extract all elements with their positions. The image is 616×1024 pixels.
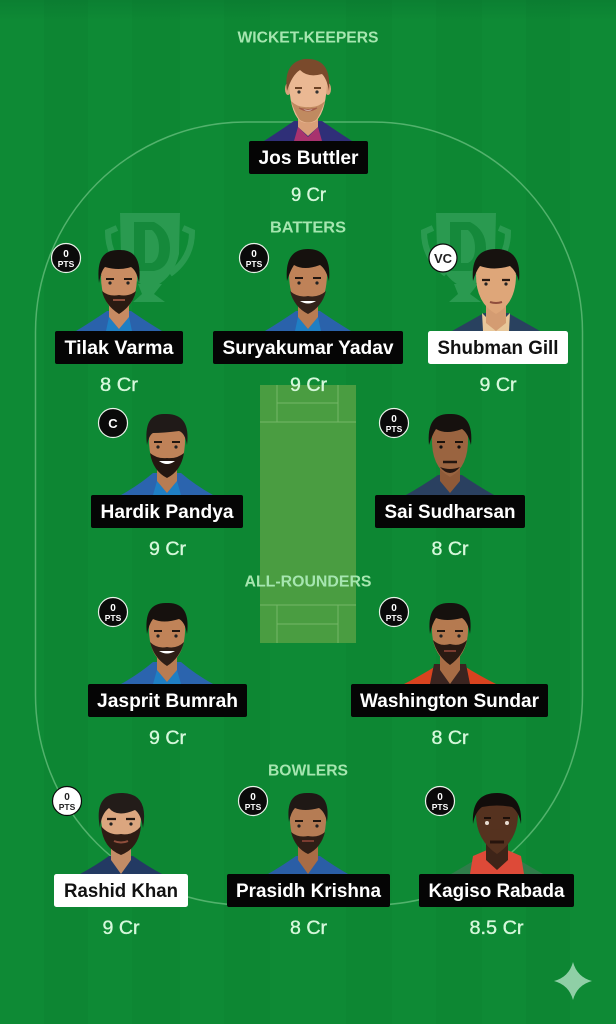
credits: 9 Cr <box>291 185 327 206</box>
player: Rashid Khan <box>52 786 188 939</box>
name label: Washington Sundar <box>360 690 539 712</box>
badge: points: 0 <box>251 249 257 260</box>
name label: Rashid Khan <box>64 880 178 902</box>
badge: points <box>380 598 408 626</box>
badge: captain <box>98 408 128 438</box>
credits: 8 Cr <box>100 375 139 396</box>
name label: Kagiso Rabada <box>428 880 565 902</box>
credits: 9 Cr <box>102 918 140 939</box>
portrait: Sai Sudharsan <box>406 414 494 495</box>
credits: 9 Cr <box>149 539 187 560</box>
name label: Jos Buttler <box>258 147 359 169</box>
credits: 9 Cr <box>480 375 517 396</box>
name label <box>54 874 188 907</box>
portrait: Prasidh Krishna <box>268 793 348 874</box>
credits: 8 Cr <box>290 918 328 939</box>
portrait: Suryakumar Yadav <box>265 249 351 331</box>
player: Kagiso Rabada <box>419 786 574 939</box>
badge: points: PTS <box>432 802 449 812</box>
badge: points: PTS <box>386 424 403 434</box>
badge: points: PTS <box>58 259 75 269</box>
credits: 8 Cr <box>432 728 469 749</box>
badge: points <box>380 408 408 438</box>
player: Jos Buttler <box>249 59 368 206</box>
badge: points: PTS <box>105 613 122 623</box>
heading: batters: BATTERS <box>270 220 346 236</box>
badge: points: PTS <box>246 259 263 269</box>
name label <box>249 141 368 174</box>
name label: Jasprit Bumrah <box>97 690 238 712</box>
badge: points: PTS <box>386 613 403 623</box>
watermark trophy left <box>108 213 192 302</box>
portrait: Jos Buttler <box>264 59 352 141</box>
name label: Suryakumar Yadav <box>222 337 394 359</box>
portrait: Jasprit Bumrah <box>121 603 213 684</box>
portrait: Hardik Pandya <box>121 414 213 495</box>
name label: Prasidh Krishna <box>236 880 381 902</box>
badge: points: PTS <box>59 802 76 812</box>
badge: points: 0 <box>391 603 397 614</box>
cricket pitch strip <box>260 385 356 643</box>
badge: vice captain <box>429 244 457 272</box>
portrait: Tilak Varma <box>76 250 162 331</box>
portrait: Washington Sundar <box>404 603 496 684</box>
name label: Hardik Pandya <box>100 501 234 523</box>
name label <box>88 684 247 717</box>
badge: points: 0 <box>391 414 397 425</box>
name label <box>351 684 548 717</box>
heading: wicket-keepers: WICKET-KEEPERS <box>238 30 379 46</box>
badge: points: PTS <box>245 802 262 812</box>
badge: points <box>52 786 82 816</box>
icon: sparkle star <box>554 962 592 1000</box>
name label <box>213 331 403 364</box>
name label: Shubman Gill <box>438 337 558 359</box>
badge: points: 0 <box>63 249 69 260</box>
player: Tilak Varma <box>52 244 183 396</box>
badge: points <box>426 786 454 816</box>
badge: points: 0 <box>110 603 116 614</box>
heading: all-rounders: ALL-ROUNDERS <box>244 574 372 590</box>
badge: points <box>240 244 268 272</box>
name label <box>428 331 568 364</box>
credits: 9 Cr <box>290 375 328 396</box>
credits: 9 Cr <box>149 728 187 749</box>
portrait: Shubman Gill <box>452 249 540 331</box>
credits: 8.5 Cr <box>470 918 524 939</box>
badge: points <box>52 244 80 272</box>
badge: points: 0 <box>250 792 256 803</box>
badge: vice captain: VC <box>434 251 453 266</box>
heading: bowlers: BOWLERS <box>268 762 348 780</box>
credits: 8 Cr <box>432 539 469 560</box>
portrait: Kagiso Rabada <box>451 793 543 874</box>
name label <box>91 495 243 528</box>
player: Prasidh Krishna <box>227 786 390 939</box>
name label: Sai Sudharsan <box>384 501 516 523</box>
player: Washington Sundar <box>351 598 548 749</box>
badge: captain: C <box>108 416 118 431</box>
watermark trophy right <box>424 213 508 302</box>
portrait: Rashid Khan <box>80 793 162 874</box>
player: Hardik Pandya <box>91 408 243 560</box>
name label: Tilak Varma <box>64 337 174 359</box>
badge: points: 0 <box>64 792 70 803</box>
player: Shubman Gill <box>428 244 568 396</box>
boundary line <box>36 122 582 905</box>
player: Jasprit Bumrah <box>88 598 247 749</box>
name label <box>375 495 525 528</box>
badge: points <box>238 786 268 816</box>
name label <box>55 331 183 364</box>
badge: points: 0 <box>437 792 443 803</box>
name label <box>227 874 390 907</box>
player: Suryakumar Yadav <box>213 244 403 396</box>
player: Sai Sudharsan <box>375 408 525 560</box>
badge: points <box>98 598 128 626</box>
name label <box>419 874 574 907</box>
